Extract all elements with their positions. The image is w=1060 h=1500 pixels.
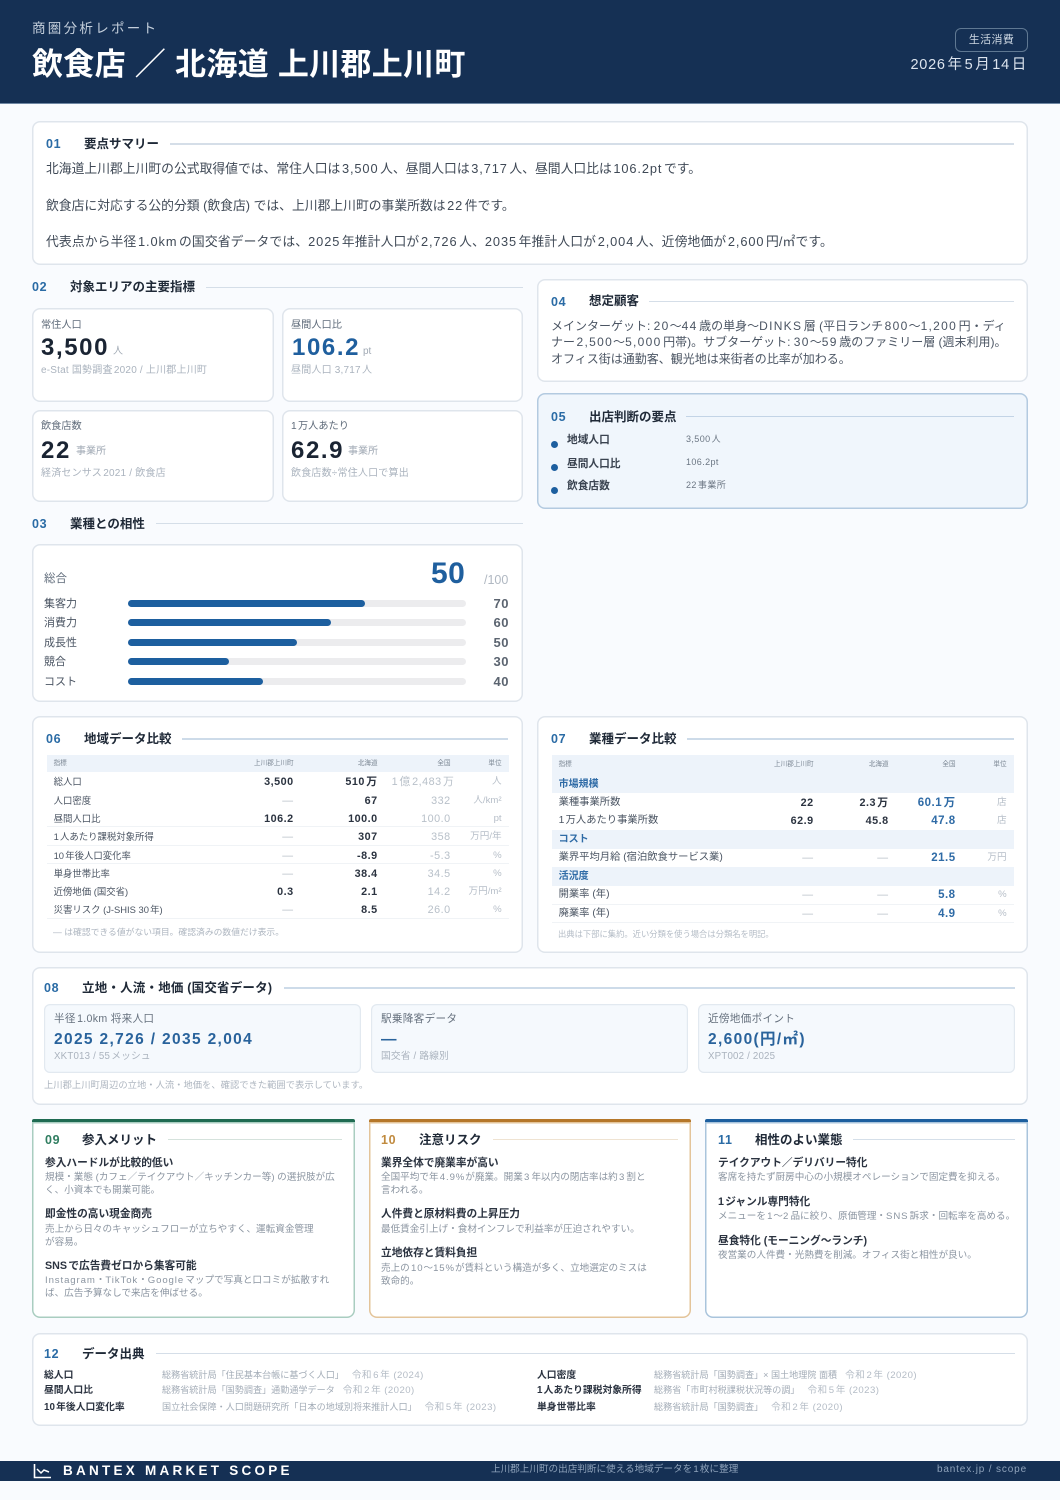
regional table: 昼間人口比 xyxy=(54,813,100,824)
industry table: 全国 xyxy=(942,760,956,768)
regional table: 8.5 xyxy=(361,904,378,916)
industry table: — xyxy=(877,908,889,920)
industry table: 45.8 xyxy=(866,815,889,827)
heading 10: 注意リスク xyxy=(419,1133,482,1147)
table note: — は確認できる値がない項目。確認済みの数値だけ表示。 xyxy=(53,927,284,937)
panel: 04 target customers xyxy=(537,279,1028,382)
card: restaurants: 経済センサス2021 / 飲食店 xyxy=(41,468,166,479)
heading 08: 08 xyxy=(44,981,59,995)
card: land price: 近傍地価ポイント xyxy=(708,1013,795,1025)
summary text: 飲食店に対応する公的分類 (飲食店) では、上川郡上川町の事業所数は22件です。 xyxy=(46,198,515,213)
regional table: 14.2 xyxy=(428,886,451,898)
regional table xyxy=(47,755,509,919)
bar: 集客力: 集客力 xyxy=(44,598,77,610)
merit 2: 売上から日々のキャッシュフローが立ちやすく、運転資金管理 xyxy=(45,1224,314,1235)
regional table: 人口密度 xyxy=(54,795,91,806)
industry table xyxy=(552,755,1014,923)
heading 01 xyxy=(46,137,1014,151)
card: future population xyxy=(44,1004,361,1073)
overall score: 50 xyxy=(431,557,465,590)
category badge xyxy=(955,28,1028,52)
risk 2 xyxy=(381,1208,640,1235)
panel: 06 regional comparison xyxy=(32,716,523,953)
report eyebrow: 商圏分析レポート xyxy=(32,21,158,36)
panel: 08 location data xyxy=(32,967,1028,1105)
heading 03: 業種との相性 xyxy=(70,517,145,531)
customer text xyxy=(551,319,1007,366)
regional table: — xyxy=(282,831,294,843)
industry table: — xyxy=(877,852,889,864)
footer band xyxy=(0,1461,1060,1481)
panel: score bars xyxy=(32,544,523,702)
title: 飲食店 ／ 北海道 上川郡上川町 xyxy=(32,47,466,82)
regional table: 災害リスク (J-SHIS 30年) xyxy=(54,904,163,915)
heading 08: 立地・人流・地価 (国交省データ) xyxy=(82,981,272,995)
risk 2: 最低賃金引上げ・食材インフレで利益率が圧迫されやすい。 xyxy=(381,1224,640,1235)
merit 3 xyxy=(45,1260,329,1299)
industry table: 店 xyxy=(997,815,1007,826)
source rows right: 総務省「市町村税課税状況等の調」 令和5年 (2023) xyxy=(654,1385,879,1396)
bar: 消費力: 60 xyxy=(494,615,509,630)
regional table: 人 xyxy=(492,776,502,787)
industry table: 21.5 xyxy=(931,852,956,864)
industry table: — xyxy=(802,852,814,864)
heading 12: 12 xyxy=(44,1347,59,1361)
customer text: オフィス街は通勤客、観光地は来街者の比率が加わる。 xyxy=(551,352,851,366)
merit 2: が容易。 xyxy=(45,1237,83,1248)
industry table: 1万人あたり事業所数 xyxy=(559,815,658,826)
heading 09: 参入メリット xyxy=(82,1133,157,1147)
heading 11: 相性のよい業態 xyxy=(755,1133,843,1147)
panel: 07 industry comparison xyxy=(537,716,1028,953)
card: station passengers: — xyxy=(381,1031,398,1048)
card: land price: 2,600(円/㎡) xyxy=(708,1031,806,1048)
card: per 10k: 飲食店数÷常住人口で算出 xyxy=(291,468,409,479)
regional table: 332 xyxy=(431,795,451,807)
footer tagline: 上川郡上川町の出店判断に使える地域データを1枚に整理 xyxy=(491,1464,738,1475)
industry table: 単位 xyxy=(993,760,1007,768)
heading 05 xyxy=(551,410,1014,424)
regional table: 万円/年 xyxy=(470,831,502,842)
heading 09: 09 xyxy=(45,1133,60,1147)
regional table: 67 xyxy=(365,795,378,807)
heading 01: 01 xyxy=(46,137,61,151)
source rows left: 10年後人口変化率 xyxy=(44,1402,125,1413)
heading 04: 04 xyxy=(551,295,566,309)
regional table: 100.0 xyxy=(421,813,451,825)
merit 3: ば、広告予算なしで来店を伸ばせる。 xyxy=(45,1288,208,1299)
regional table: 北海道 xyxy=(358,760,378,766)
format 3: 昼食特化 (モーニング～ランチ) xyxy=(718,1235,867,1247)
regional table: % xyxy=(493,850,502,861)
regional table: % xyxy=(493,904,502,915)
merit 3: SNSで広告費ゼロから集客可能 xyxy=(45,1260,197,1272)
overall label: 総合 xyxy=(44,573,67,585)
regional table: 総人口 xyxy=(54,776,82,787)
regional table: 近傍地価 (国交省) xyxy=(54,886,128,897)
section 03: compatibility xyxy=(32,517,523,702)
point: 飲食店数: 22事業所 xyxy=(686,480,726,490)
bar: 競合: 競合 xyxy=(44,656,66,668)
bar: 競合 xyxy=(44,654,509,669)
format 3: 夜営業の人件費・光熱費を削減。オフィス街と相性が良い。 xyxy=(718,1250,977,1261)
regional table: -5.3 xyxy=(430,850,451,862)
source rows left: 国立社会保障・人口問題研究所「日本の地域別将来推計人口」 令和5年 (2023) xyxy=(162,1402,497,1413)
industry table: — xyxy=(802,889,814,901)
card: daytime ratio: 106.2 xyxy=(292,334,360,361)
heading 03 xyxy=(32,517,523,531)
regional table: % xyxy=(493,868,502,879)
heading 06 xyxy=(46,732,508,746)
point: 昼間人口比 xyxy=(551,457,719,471)
regional table: 106.2 xyxy=(264,813,294,825)
card: resident population: e-Stat 国勢調査2020 / 上川郡上川町 xyxy=(41,365,207,376)
bar: 消費力: 消費力 xyxy=(44,617,77,629)
panel: 10 risks xyxy=(369,1119,691,1318)
heading 10: 10 xyxy=(381,1133,396,1147)
heading 11 xyxy=(718,1133,1015,1147)
format 1 xyxy=(718,1156,1005,1183)
header band xyxy=(0,0,1060,104)
regional table: 10年後人口変化率 xyxy=(54,850,131,861)
industry table: — xyxy=(877,889,889,901)
source rows right: 単身世帯比率 xyxy=(537,1402,596,1413)
card: restaurants xyxy=(32,410,274,502)
card: restaurants: 22 xyxy=(41,437,71,464)
regional table: 人/km² xyxy=(473,795,502,806)
regional table: 26.0 xyxy=(428,904,451,916)
customer text: ナー2,500～5,000円帯)。サブターゲット: 30～59歳のファミリー層 (週末利用)。 xyxy=(551,335,1007,349)
regional table: 34.5 xyxy=(428,868,451,880)
industry table: 62.9 xyxy=(791,815,814,827)
regional table: 2.1 xyxy=(361,886,378,898)
regional table: 1人あたり課税対象所得 xyxy=(54,831,154,842)
bar: 集客力 xyxy=(44,596,509,611)
industry table: % xyxy=(998,889,1007,900)
source rows right: 総務省統計局「国勢調査」 令和2年 (2020) xyxy=(654,1402,843,1413)
industry table: 22 xyxy=(801,797,814,809)
regional table: — xyxy=(282,850,294,862)
card: station passengers xyxy=(371,1004,688,1073)
point: 地域人口 xyxy=(551,434,721,448)
heading 03: 03 xyxy=(32,517,47,531)
industry table: 活況度 xyxy=(559,871,589,882)
panel: 09 merits xyxy=(32,1119,355,1318)
industry table: 開業率 (年) xyxy=(559,889,610,900)
bar: コスト: 40 xyxy=(494,674,509,689)
point: 飲食店数 xyxy=(551,480,726,494)
bar: 競合: 30 xyxy=(494,654,509,669)
bar: 消費力 xyxy=(44,615,509,630)
card: daytime ratio xyxy=(282,308,523,402)
regional table: -8.9 xyxy=(357,850,378,862)
point: 地域人口: 3,500人 xyxy=(686,434,721,444)
card: future population: 2025 2,726 / 2035 2,004 xyxy=(54,1031,253,1048)
heading 02 xyxy=(32,280,523,294)
regional table: — xyxy=(282,868,294,880)
card: land price xyxy=(698,1004,1015,1073)
industry table: 指標 xyxy=(559,760,572,768)
source rows right: 1人あたり課税対象所得 xyxy=(537,1385,642,1396)
industry table: 業界平均月給 (宿泊飲食サービス業) xyxy=(559,852,723,863)
industry table: 店 xyxy=(997,797,1007,808)
card: resident population: 常住人口 xyxy=(41,320,82,331)
merit 1 xyxy=(45,1156,335,1196)
industry table: 47.8 xyxy=(931,815,956,827)
heading 12: データ出典 xyxy=(82,1347,145,1361)
heading 08 xyxy=(44,980,1015,995)
source rows right xyxy=(537,1370,917,1413)
format 2: メニューを1～2品に絞り、原価管理・SNS訴求・回転率を高める。 xyxy=(718,1211,1015,1222)
risk 3: 立地依存と賃料負担 xyxy=(381,1247,477,1259)
industry table: — xyxy=(802,908,814,920)
merit 2: 即金性の高い現金商売 xyxy=(45,1208,152,1220)
risk 3: 売上の10～15%が賃料という構造が多く、立地選定のミスは xyxy=(381,1263,647,1274)
point: 昼間人口比: 昼間人口比 xyxy=(567,458,620,470)
bar: 成長性: 50 xyxy=(494,635,509,650)
heading 09 xyxy=(45,1133,342,1147)
regional table: 3,500 xyxy=(264,776,294,788)
industry table: 万円 xyxy=(987,852,1007,863)
bar: コスト xyxy=(44,674,509,689)
heading 07 xyxy=(551,732,1014,746)
industry table: 上川郡上川町 xyxy=(774,760,814,768)
merit 1: く、小資本でも開業可能。 xyxy=(45,1185,160,1196)
icon: line chart logo xyxy=(34,1464,51,1478)
card: land price: XPT002 / 2025 xyxy=(708,1051,775,1062)
format 1: テイクアウト／デリバリー特化 xyxy=(718,1157,867,1169)
heading 05: 出店判断の要点 xyxy=(589,410,677,424)
card: daytime ratio: 昼間人口比 xyxy=(291,320,342,331)
risk 1: 全国平均で年4.9%が廃業。開業3年以内の閉店率は約3割と xyxy=(381,1172,646,1183)
regional table: 上川郡上川町 xyxy=(254,760,294,766)
point: 飲食店数: 飲食店数 xyxy=(567,480,610,492)
regional table: 1億2,483万 xyxy=(392,776,454,788)
card: per 10k: 62.9 xyxy=(291,437,344,464)
format 2: 1ジャンル専門特化 xyxy=(718,1196,810,1208)
brand name: BANTEX MARKET SCOPE xyxy=(63,1463,293,1478)
source rows right: 総務省統計局「国勢調査」× 国土地理院 面積 令和2年 (2020) xyxy=(654,1370,917,1381)
regional table: 指標 xyxy=(54,760,67,766)
risk 1 xyxy=(381,1156,646,1196)
industry table: 4.9 xyxy=(938,908,956,920)
regional table: 単位 xyxy=(488,760,502,766)
heading 07: 業種データ比較 xyxy=(589,732,677,746)
regional table: pt xyxy=(494,813,502,824)
score max: /100 xyxy=(484,573,508,587)
heading 07: 07 xyxy=(551,732,566,746)
card: per 10k: 事業所 xyxy=(348,446,378,457)
card: restaurants: 飲食店数 xyxy=(41,421,82,432)
heading 06: 06 xyxy=(46,732,61,746)
heading 06: 地域データ比較 xyxy=(84,732,172,746)
card: resident population: 人 xyxy=(113,346,123,357)
industry table: 業種事業所数 xyxy=(559,797,620,808)
summary text: 北海道上川郡上川町の公式取得値では、常住人口は3,500人、昼間人口は3,717人、昼間人口比は106.2ptです。 xyxy=(46,161,701,176)
source rows left: 昼間人口比 xyxy=(44,1385,93,1396)
regional table: 358 xyxy=(431,831,451,843)
merit 1: 参入ハードルが比較的低い xyxy=(45,1157,173,1169)
regional table: 307 xyxy=(358,831,378,843)
risk 3: 致命的。 xyxy=(381,1276,419,1287)
industry table: 60.1万 xyxy=(918,797,956,809)
regional table: 単身世帯比率 xyxy=(54,868,110,879)
merit 3: Instagram・TikTok・Googleマップで写真と口コミが拡散すれ xyxy=(45,1275,329,1286)
regional table: 万円/m² xyxy=(469,886,502,897)
footer url: bantex.jp / scope xyxy=(937,1464,1027,1475)
heading 11: 11 xyxy=(718,1133,733,1147)
source rows left xyxy=(44,1370,497,1413)
regional table: 100.0 xyxy=(348,813,378,825)
category badge: 生活消費 xyxy=(969,34,1014,46)
industry table: % xyxy=(998,908,1007,919)
regional table: — xyxy=(282,795,294,807)
heading 04 xyxy=(551,294,1014,309)
panel: 11 compatible formats xyxy=(705,1119,1028,1318)
location note: 上川郡上川町周辺の立地・人流・地価を、確認できた範囲で表示しています。 xyxy=(44,1080,368,1090)
source rows left: 総務省統計局「国勢調査」通勤通学データ 令和2年 (2020) xyxy=(162,1385,415,1396)
customer text: メインターゲット: 20～44歳の単身～DINKS層 (平日ランチ800～1,200円・ディ xyxy=(551,319,1006,333)
risk 2: 人件費と原材料費の上昇圧力 xyxy=(381,1208,520,1220)
card: station passengers: 駅乗降客データ xyxy=(381,1013,457,1025)
card: per 10k xyxy=(282,410,523,502)
panel: 12 data sources xyxy=(32,1333,1028,1426)
format 1: 客席を持たず厨房中心の小規模オペレーションで固定費を抑える。 xyxy=(718,1172,1005,1183)
card: daytime ratio: 昼間人口 3,717人 xyxy=(291,365,372,376)
risk 1: 業界全体で廃業率が高い xyxy=(381,1157,499,1169)
bar: コスト: コスト xyxy=(44,676,77,688)
heading 01: 要点サマリー xyxy=(84,137,159,151)
panel: 01 summary xyxy=(32,121,1028,265)
industry table: 市場規模 xyxy=(559,778,599,790)
regional table: 全国 xyxy=(437,760,451,766)
summary text xyxy=(46,161,833,249)
panel: 05 decision points xyxy=(537,393,1028,509)
merit 1: 規模・業態 (カフェ／テイクアウト／キッチンカー等) の選択肢が広 xyxy=(45,1172,335,1183)
risk 3 xyxy=(381,1246,647,1287)
table note: 出典は下部に集約。近い分類を使う場合は分類名を明記。 xyxy=(558,929,774,939)
source rows left: 総務省統計局「住民基本台帳に基づく人口」 令和6年 (2024) xyxy=(162,1370,424,1381)
merit 2 xyxy=(45,1208,314,1248)
industry table: コスト xyxy=(559,834,589,845)
point: 地域人口: 地域人口 xyxy=(567,434,610,446)
bar: 成長性: 成長性 xyxy=(44,637,77,649)
heading 02: 対象エリアの主要指標 xyxy=(70,280,195,294)
source rows left: 総人口 xyxy=(44,1370,73,1381)
industry table: 2.3万 xyxy=(859,797,889,809)
bar: 成長性 xyxy=(44,635,509,650)
risk 1: 言われる。 xyxy=(381,1185,428,1196)
point: 昼間人口比: 106.2pt xyxy=(686,457,719,467)
card: resident population: 3,500 xyxy=(41,334,109,361)
heading 05: 05 xyxy=(551,410,566,424)
regional table: — xyxy=(282,904,294,916)
regional table: 38.4 xyxy=(355,868,378,880)
card: future population: 半径1.0km 将来人口 xyxy=(54,1013,154,1025)
heading 02: 02 xyxy=(32,280,47,294)
card: daytime ratio: pt xyxy=(363,346,371,357)
format 3 xyxy=(718,1234,977,1261)
card: restaurants: 事業所 xyxy=(76,446,106,457)
format 2 xyxy=(718,1196,1015,1222)
card: resident population xyxy=(32,308,274,402)
industry table: 廃業率 (年) xyxy=(559,908,610,919)
summary text: 代表点から半径1.0kmの国交省データでは、2025年推計人口が2,726人、2035年推計人口が2,004人、近傍地価が2,600円/㎡です。 xyxy=(46,234,833,249)
card: per 10k: 1万人あたり xyxy=(291,421,349,432)
heading 04: 想定顧客 xyxy=(589,294,639,308)
source rows right: 人口密度 xyxy=(537,1370,576,1381)
bar: 集客力: 70 xyxy=(494,596,509,611)
section 02: key indicators xyxy=(32,280,523,502)
date: 2026年5月14日 xyxy=(910,57,1027,73)
heading 12 xyxy=(44,1346,1015,1361)
heading 10 xyxy=(381,1133,678,1147)
industry table: 5.8 xyxy=(938,889,956,901)
regional table: 0.3 xyxy=(277,886,294,898)
industry table: 北海道 xyxy=(869,760,889,768)
regional table: 510万 xyxy=(345,776,378,788)
card: station passengers: 国交省 / 路線別 xyxy=(381,1051,449,1062)
card: future population: XKT013 / 55メッシュ xyxy=(54,1051,151,1062)
